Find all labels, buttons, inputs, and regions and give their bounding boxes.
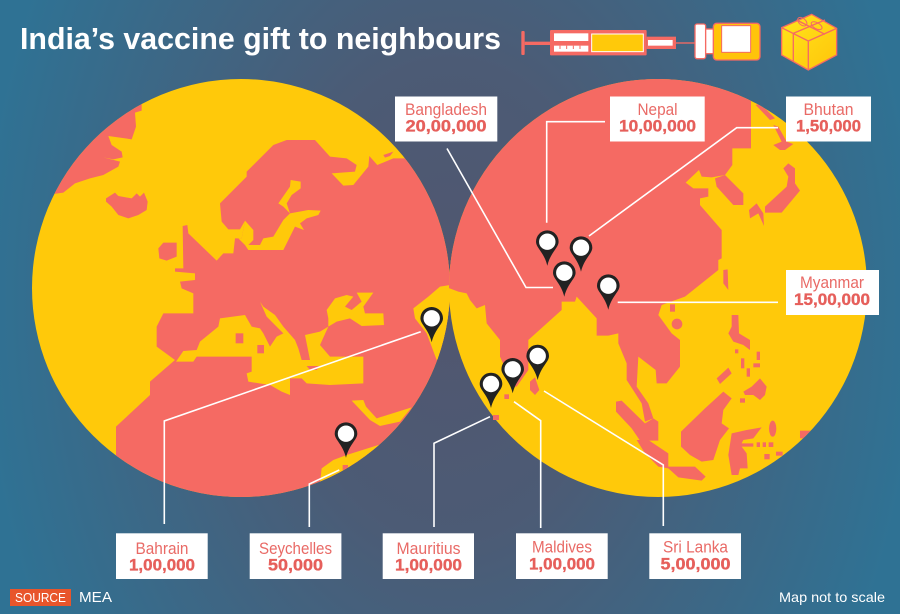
label: Myanmar (786, 270, 879, 315)
pin: Sri Lanka (526, 345, 549, 380)
label: Maldives (516, 533, 608, 579)
label: Mauritius: Mauritius (396, 539, 460, 558)
globe disc: Asia (449, 79, 867, 497)
pin: Myanmar (597, 274, 620, 310)
label: Myanmar: 15,00,000 (794, 290, 870, 309)
label: Bahrain: Bahrain (136, 539, 188, 558)
label: Nepal (610, 96, 705, 142)
land: Mauritius (493, 415, 499, 420)
land: Asia and islands (449, 79, 810, 481)
globe disc: Europe and Africa (32, 79, 450, 497)
leader line: Bhutan (589, 128, 778, 236)
leader line: Seychelles (309, 470, 339, 527)
panel: right globe map (449, 79, 866, 497)
label: Sri Lanka (649, 533, 741, 579)
leader line: Mauritius (434, 417, 490, 527)
label: Maldives: Maldives (532, 538, 592, 556)
leader line: Sri Lanka (544, 391, 663, 526)
icon: gift box (782, 14, 837, 70)
pin: Seychelles (335, 422, 357, 458)
label: Mauritius (383, 533, 474, 579)
source tag: SOURCE (15, 590, 66, 605)
note: map not to scale: Map not to scale (779, 589, 885, 605)
leader line: Myanmar (618, 301, 778, 303)
pin: Nepal (536, 230, 559, 266)
label: Bangladesh: 20,00,000 (406, 117, 486, 136)
pin: Bhutan (570, 236, 592, 272)
label: Maldives: 1,00,000 (529, 554, 595, 573)
label: Bahrain: 1,00,000 (129, 556, 195, 575)
label: Seychelles (250, 533, 341, 579)
panel: left globe map (32, 79, 450, 497)
title: India’s vaccine gift to neighbours (20, 21, 501, 56)
label: Bangladesh: Bangladesh (405, 100, 487, 119)
land: Europe, Africa and West Asia (54, 104, 450, 497)
label: Bangladesh (395, 96, 497, 142)
pin: Bangladesh (553, 261, 576, 297)
label: Sri Lanka: 5,00,000 (660, 554, 730, 573)
label: Bhutan: Bhutan (804, 100, 854, 119)
label: Bhutan (786, 96, 871, 142)
pin: Maldives (501, 358, 524, 393)
icon: syringe (521, 30, 695, 55)
pin: Bahrain (420, 307, 443, 342)
leader line: Maldives (514, 402, 541, 528)
label: Nepal: 10,00,000 (619, 117, 696, 136)
label: Seychelles: 50,000 (268, 556, 323, 575)
pin: Mauritius (480, 373, 502, 408)
label: Bahrain (116, 533, 208, 579)
leader line: Nepal (547, 122, 605, 223)
leader line: Bahrain (164, 332, 421, 524)
label: Sri Lanka: Sri Lanka (663, 538, 728, 556)
label: Myanmar: Myanmar (800, 273, 864, 292)
label: Bhutan: 1,50,000 (796, 117, 861, 136)
label: Mauritius: 1,00,000 (395, 556, 462, 575)
leader line: Bangladesh (447, 148, 553, 288)
source name: MEA (79, 589, 112, 606)
label: Seychelles: Seychelles (259, 539, 332, 558)
label: Nepal: Nepal (638, 100, 678, 119)
icon: vaccine vial (695, 23, 760, 60)
